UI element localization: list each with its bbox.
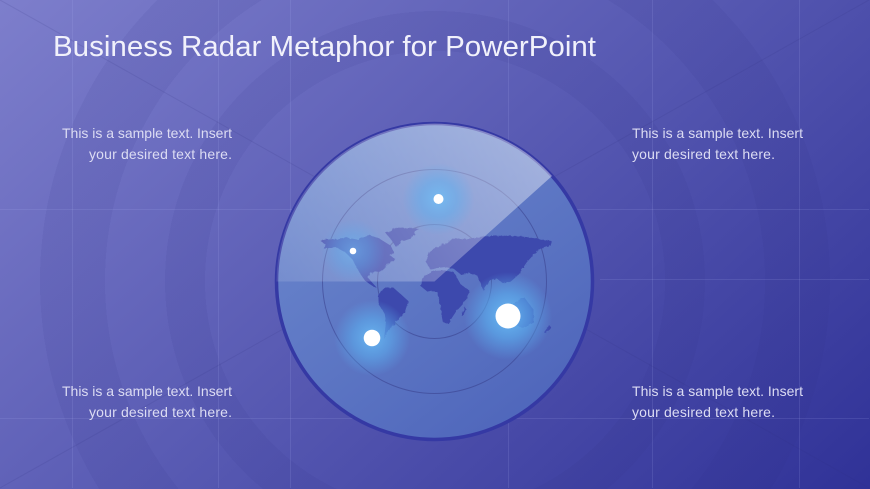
signal: south america bbox=[334, 300, 410, 376]
text block: bottom right: your desired text here. bbox=[632, 404, 775, 420]
signal: australia bbox=[464, 272, 552, 360]
North America bbox=[320, 235, 395, 288]
South America bbox=[378, 287, 408, 339]
text block: top left: your desired text here. bbox=[89, 146, 232, 162]
Australia bbox=[505, 297, 534, 328]
Eurasia bbox=[426, 236, 552, 290]
New Zealand bbox=[544, 325, 551, 334]
text block: top right bbox=[632, 125, 803, 162]
radar range rings bbox=[322, 170, 546, 394]
radar sweep highlight bbox=[276, 124, 552, 281]
text block: bottom right: This is a sample text. Insert bbox=[632, 383, 803, 399]
world map bbox=[320, 228, 552, 339]
radar disc bbox=[276, 124, 592, 440]
text block: bottom right bbox=[632, 383, 803, 420]
signal: top bbox=[402, 163, 474, 235]
title: Business Radar Metaphor for PowerPoint bbox=[53, 31, 596, 63]
text block: top left bbox=[62, 125, 232, 162]
text block: bottom left: This is a sample text. Insert bbox=[62, 383, 232, 399]
text block: bottom left bbox=[62, 383, 232, 420]
text block: top left: This is a sample text. Insert bbox=[62, 125, 232, 141]
Africa bbox=[420, 270, 470, 323]
text block: top right: your desired text here. bbox=[632, 146, 775, 162]
signal: north america bbox=[321, 219, 385, 283]
disc face bbox=[276, 124, 592, 440]
text block: top right: This is a sample text. Insert bbox=[632, 125, 803, 141]
Greenland bbox=[385, 228, 418, 248]
Madagascar bbox=[461, 307, 466, 316]
text block: bottom left: your desired text here. bbox=[89, 404, 232, 420]
